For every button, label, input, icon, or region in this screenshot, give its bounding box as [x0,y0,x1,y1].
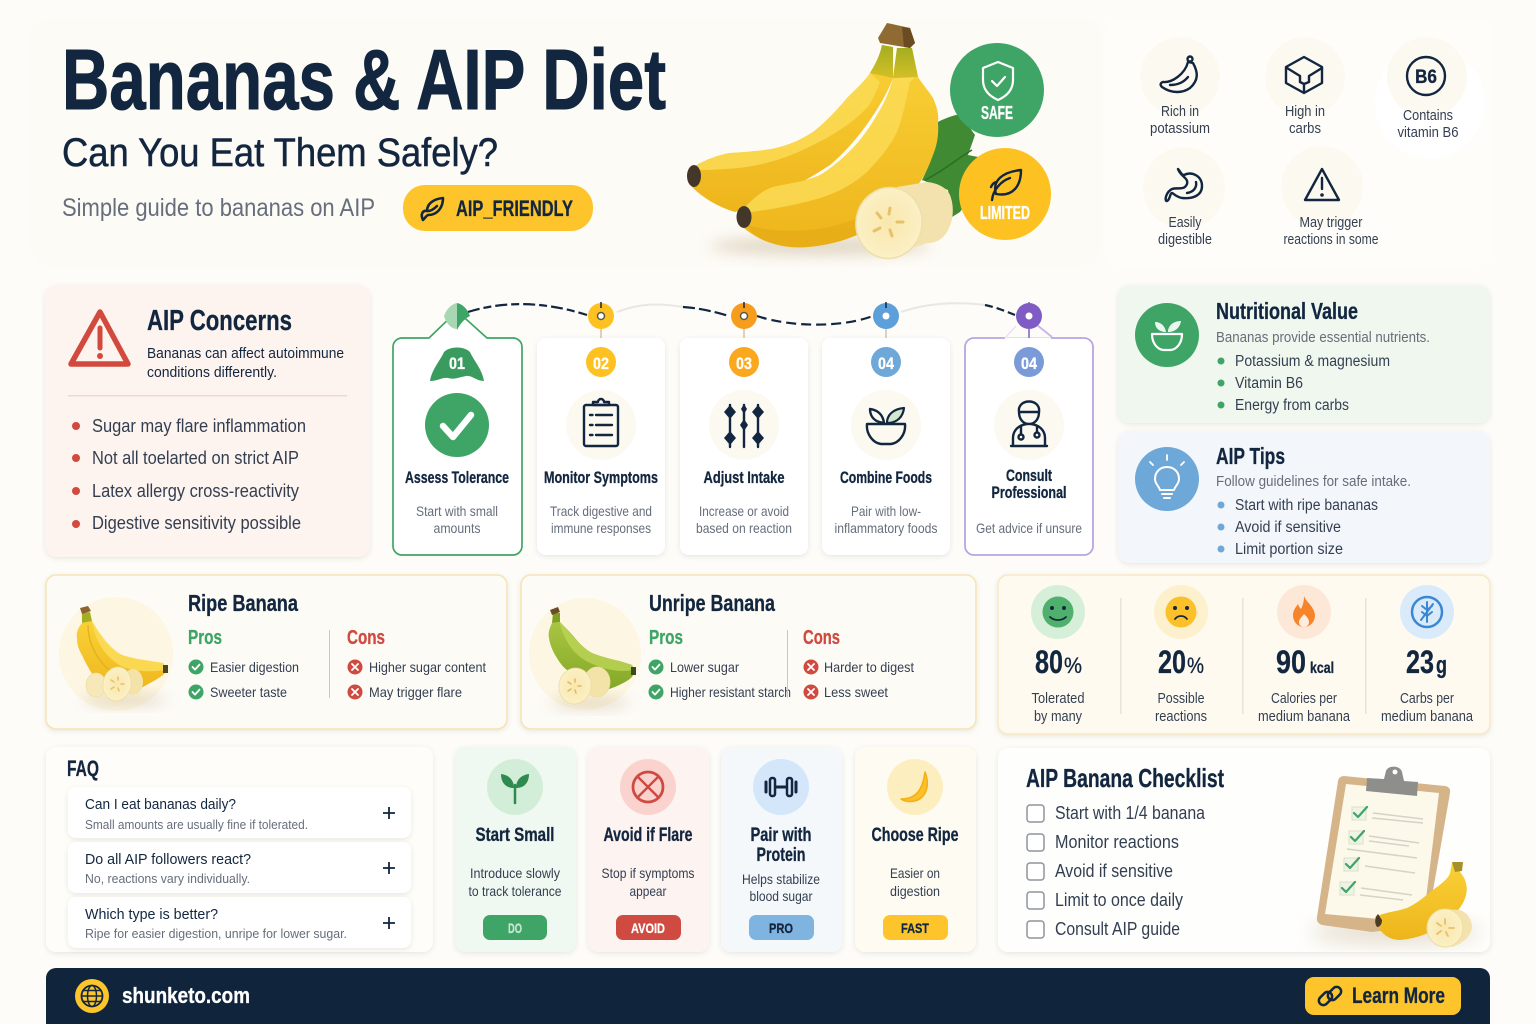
step card 5: consult professional: Consult [1006,467,1052,485]
pros list [648,627,791,700]
cons list: Less sweet [824,684,888,700]
stat: 23g carbs: Carbs per [1400,691,1454,707]
panel: nutritional value: Nutritional Value [1216,298,1358,324]
step number 01 [430,348,484,381]
panel: stats [998,575,1490,734]
tip card: pair with protein: Protein [756,845,806,866]
cons list: Cons [347,627,385,649]
step number 04 [1014,347,1044,377]
fact: potassium [1140,37,1220,137]
timeline node 5 [1016,302,1042,338]
step card 3: adjust intake: Adjust Intake [704,469,784,487]
button: learn more [1305,977,1461,1015]
fact: digestible [1143,147,1225,248]
pros list: Pros [188,627,222,649]
timeline connector [457,303,1015,338]
panel: nutritional value: Bananas provide essential nutrients. [1216,330,1430,346]
tip card: pair with protein: blood sugar [750,888,813,904]
illustration: ripe banana [59,597,173,711]
step card 3: adjust intake [680,302,808,555]
tip card: pair with protein [721,747,842,952]
stat: 23g carbs: g [1436,652,1447,679]
panel: AIP tips [1118,431,1490,563]
pros list: Easier digestion [210,659,299,675]
step number 03: 03 [736,354,752,373]
step number 01: 01 [449,354,465,373]
tips list: Start with ripe bananas [1235,497,1378,514]
panel: unripe banana: Unripe Banana [649,590,775,616]
tip card: pair with protein: Helps stabilize [742,871,820,887]
step number 02: 02 [593,354,609,373]
badge: LIMITED [959,148,1051,240]
stat: 20% reactions [1154,585,1208,725]
hero panel [30,18,1102,266]
tip card: start small: Start Small [476,825,554,846]
FAQ item 1 [68,787,411,838]
icon: warning triangle [71,312,128,364]
icon: dumbbell [753,759,809,815]
fact: digestible: Easily [1168,215,1202,231]
checklist items [1027,803,1206,939]
pill: PRO: PRO [769,920,793,936]
step card 5: consult professional: Get advice if unsure [976,520,1082,536]
fact: potassium: potassium [1150,121,1210,137]
checklist items: Start with 1/4 banana [1055,803,1206,823]
step card 2: monitor symptoms [537,302,665,555]
stat: 23g carbs: 23 [1406,644,1434,680]
tagline: Simple guide to bananas on AIP [62,194,375,222]
pros list: Lower sugar [670,659,739,675]
badge: AIP_FRIENDLY: AIP_FRIENDLY [456,196,573,221]
tip card: pair with protein: Pair with [750,825,812,846]
panel: checklist: AIP Banana Checklist [1026,763,1224,793]
concern list: Latex allergy cross-reactivity [92,481,299,501]
concern list: Sugar may flare inflammation [92,416,306,436]
panel: checklist [998,748,1490,952]
intro text: conditions differently. [147,364,277,381]
cons list: Cons [803,627,840,649]
cons list: May trigger flare [369,684,462,700]
step number 04: 04 [1021,354,1037,373]
step card 1: assess tolerance: amounts [434,520,480,536]
stat: 90 kcal: medium banana [1258,709,1351,725]
stat: 90 kcal [1258,585,1351,725]
icon: sprout [487,759,543,815]
tip card: choose ripe: Choose Ripe [872,825,958,846]
step card 5: consult professional: Professional [992,484,1066,502]
step card 2: monitor symptoms: Track digestive and [550,503,652,519]
FAQ item 3: Which type is better? [85,906,218,923]
stat: 20% reactions: Possible [1158,691,1204,707]
panel: ripe banana [46,575,507,729]
step card 2: monitor symptoms: immune responses [551,520,651,536]
FAQ item 2 [68,842,411,893]
checklist items: Consult AIP guide [1055,919,1180,939]
panel: unripe banana [521,575,976,729]
step card 4: combine foods: inflammatory foods [834,520,938,536]
stat: 80% tolerated: by many [1034,709,1083,725]
tip card: avoid if flare: appear [630,883,667,899]
icon: no symbol [620,759,676,815]
fact: potassium: Rich in [1161,104,1199,120]
fact: may trigger reactions: reactions in some [1284,232,1378,248]
stat: 23g carbs [1381,585,1474,725]
step number 04 [871,347,901,377]
step card 4: combine foods: Pair with low- [851,503,921,519]
icon: check circle [425,393,489,457]
pill: FAST [883,915,948,940]
nutrient list: Potassium & magnesium [1235,353,1390,370]
tip card: choose ripe [855,747,976,952]
tip card: choose ripe: Easier on [890,865,940,881]
fact: may trigger reactions: May trigger [1300,215,1363,231]
pill: AVOID [616,915,681,940]
cons list [347,627,486,700]
illustration: clipboard with banana [1310,767,1480,947]
stat: 80% tolerated: Tolerated [1032,691,1084,707]
pill: PRO [749,915,814,940]
checklist items: Limit to once daily [1055,890,1183,910]
fact: carbs: High in [1285,104,1325,120]
icon: doctor [994,390,1064,460]
hero banana illustration [687,23,978,264]
tip card: start small [455,747,576,952]
panel: AIP tips: Follow guidelines for safe intake. [1216,474,1411,490]
concern list [72,416,306,533]
fact: carbs: carbs [1289,121,1321,137]
badge: SAFE [950,43,1044,137]
stat: 90 kcal: kcal [1310,660,1334,677]
icon: bowl with leaves [851,390,921,460]
timeline node 2 [588,302,614,329]
timeline node 4 [873,302,899,329]
stat: 20% reactions: reactions [1155,709,1207,725]
stat: 80% tolerated: % [1064,653,1082,678]
tip card: start small: to track tolerance [468,883,562,899]
badge: SAFE: SAFE [981,103,1013,123]
concern list: Digestive sensitivity possible [92,513,301,533]
fact: vitamin B6: Contains [1403,108,1453,124]
illustration: unripe banana [529,598,641,710]
FAQ item 2: No, reactions vary individually. [85,871,250,886]
pros list: Sweeter taste [210,684,287,700]
intro text: Bananas can affect autoimmune [147,345,344,362]
FAQ item 1: Small amounts are usually fine if tolerated. [85,817,308,832]
step card 3: adjust intake: Increase or avoid [699,503,789,519]
step number 02 [586,347,616,377]
step card 4: combine foods: Combine Foods [840,469,932,487]
nutrient list [1218,353,1390,414]
step number 04: 04 [878,354,894,373]
stat: 20% reactions: % [1187,653,1204,678]
step card 3: adjust intake: based on reaction [696,520,792,536]
FAQ item 1: Can I eat bananas daily? [85,796,236,813]
FAQ item 3 [68,897,411,948]
panel: AIP concerns [45,285,370,557]
panel: nutritional value [1118,285,1490,423]
badge: AIP_FRIENDLY [403,185,593,231]
footer bar [46,968,1490,1024]
icon: sliders [709,390,779,460]
cons list: Higher sugar content [369,659,486,675]
checklist items: Avoid if sensitive [1055,861,1173,881]
fact: vitamin B6: B6 [1415,67,1437,88]
step card 1: assess tolerance: Assess Tolerance [405,469,509,487]
tip card: choose ripe: digestion [890,883,940,899]
step card 1: assess tolerance: Start with small [416,503,498,519]
intro text [147,345,344,381]
badge: LIMITED: LIMITED [980,203,1030,223]
timeline node 1 [444,303,470,330]
pros list: Pros [649,627,683,649]
tip card: start small: Introduce slowly [470,865,560,881]
step card 4: combine foods [822,302,950,555]
panel: FAQ [46,747,433,952]
stat: 80% tolerated [1031,585,1085,725]
pill: AVOID: AVOID [631,920,665,936]
icon: clipboard [566,390,636,460]
fact: carbs [1265,37,1345,137]
step number 03 [729,347,759,377]
concern list: Not all toelarted on strict AIP [92,448,299,468]
tips list [1218,497,1378,558]
title: Bananas & AIP Diet [62,33,666,128]
icon: light bulb [1135,447,1199,511]
step card 1: assess tolerance [393,303,522,555]
fact: vitamin B6 [1387,37,1467,141]
stat: 90 kcal: Calories per [1271,691,1337,707]
button: learn more: Learn More [1352,983,1445,1008]
timeline node 3 [731,302,757,329]
step card 5: consult professional [965,302,1093,555]
FAQ item 2: Do all AIP followers react? [85,851,251,868]
pill: DO: DO [508,920,522,936]
tip card: avoid if flare [588,747,709,952]
fact: digestible: digestible [1158,232,1212,248]
step card 2: monitor symptoms: Monitor Symptoms [544,469,658,487]
stat: 20% reactions: 20 [1158,644,1186,680]
cons list: Harder to digest [824,659,914,675]
footer bar: shunketo.com [122,983,250,1008]
subtitle: Can You Eat Them Safely? [62,131,498,175]
pill: DO [483,915,547,940]
icon: banana [887,759,943,815]
checklist items: Monitor reactions [1055,832,1179,852]
icon: bowl [1135,303,1199,367]
nutrient list: Vitamin B6 [1235,375,1303,392]
fact: vitamin B6: vitamin B6 [1398,125,1458,141]
pill: FAST: FAST [901,920,929,936]
pros list: Higher resistant starch [670,684,791,700]
panel: nutrition highlights [1104,18,1494,266]
pros list [188,627,299,700]
panel: ripe banana: Ripe Banana [188,590,298,616]
tips list: Limit portion size [1235,541,1343,558]
cons list [803,627,914,700]
nutrient list: Energy from carbs [1235,397,1349,414]
FAQ item 3: Ripe for easier digestion, unripe for lower sugar. [85,926,347,941]
stat: 90 kcal: 90 [1276,644,1306,680]
panel: AIP tips: AIP Tips [1216,443,1285,469]
tip card: avoid if flare: Stop if symptoms [602,865,694,881]
stat: 23g carbs: medium banana [1381,709,1474,725]
fact: may trigger reactions [1281,146,1378,248]
tip card: avoid if flare: Avoid if Flare [604,825,692,846]
tips list: Avoid if sensitive [1235,519,1341,536]
heading: AIP Concerns [147,305,292,337]
icon: globe [75,979,109,1013]
stat: 80% tolerated: 80 [1035,644,1063,680]
panel: FAQ: FAQ [67,756,99,781]
